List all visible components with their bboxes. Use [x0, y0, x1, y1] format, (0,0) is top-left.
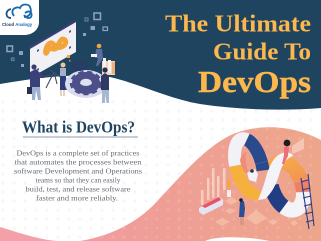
- description text: teams so that they can easily: [36, 176, 121, 184]
- person in loop: [247, 169, 258, 182]
- icon: cloud logo: [6, 4, 32, 18]
- description text: software Development and Operations: [14, 166, 142, 176]
- bar pillars: [201, 168, 226, 205]
- logo panel: [0, 0, 39, 35]
- right ring navy side: [264, 157, 310, 215]
- left ring navy lower: [229, 136, 269, 196]
- right ring white bottom: [264, 157, 310, 215]
- title: Guide To: [213, 40, 311, 66]
- decorative squares: [7, 13, 108, 60]
- illustration: devops team: [7, 13, 115, 103]
- sitting person: [95, 49, 103, 66]
- right person: [101, 73, 109, 90]
- left ring navy: [229, 136, 269, 196]
- description text: build, test, and release software: [26, 184, 130, 194]
- description text: that automates the processes between: [14, 158, 142, 166]
- description text: DevOps is a complete set of practices: [16, 148, 140, 158]
- orange sparks: [67, 55, 70, 58]
- description text: faster and more reliably.: [36, 194, 118, 202]
- infinity symbol: [46, 39, 66, 53]
- right ring orange lower: [264, 157, 310, 215]
- woman standing: [239, 201, 245, 217]
- floor tiles: [215, 197, 298, 226]
- dark header background: [0, 0, 321, 110]
- title: The Ultimate: [165, 12, 311, 38]
- pink wave background: [0, 127, 321, 241]
- left ring yellow: [229, 136, 269, 196]
- title: [165, 12, 311, 99]
- left person: [30, 69, 45, 87]
- person on top: [284, 140, 290, 146]
- loop: white twist: [258, 152, 293, 200]
- gear shadow disc: [65, 70, 107, 98]
- heading: What is DevOps?: What is DevOps?: [22, 118, 135, 136]
- loop: pink inner: [240, 152, 250, 178]
- logo text: Cloud Analogy: [2, 22, 33, 27]
- server blocks: [102, 61, 115, 75]
- middle person: [60, 76, 67, 90]
- ladder: [301, 174, 314, 229]
- title: DevOps: [198, 64, 311, 99]
- illustration: devops loop: [199, 136, 314, 229]
- loop: right ring: [264, 157, 310, 215]
- description text: [14, 148, 142, 202]
- heading underline: [23, 136, 138, 138]
- vase and plant: [227, 190, 231, 197]
- tripod: [45, 70, 62, 88]
- small gear: [74, 62, 86, 70]
- presentation board: [30, 22, 76, 78]
- loop: left ring: [229, 136, 269, 196]
- large gear: [72, 72, 100, 94]
- left ring white: [229, 136, 269, 196]
- platform with chart: [199, 197, 223, 215]
- floating card: [292, 138, 304, 154]
- right ring orange arc: [264, 157, 310, 215]
